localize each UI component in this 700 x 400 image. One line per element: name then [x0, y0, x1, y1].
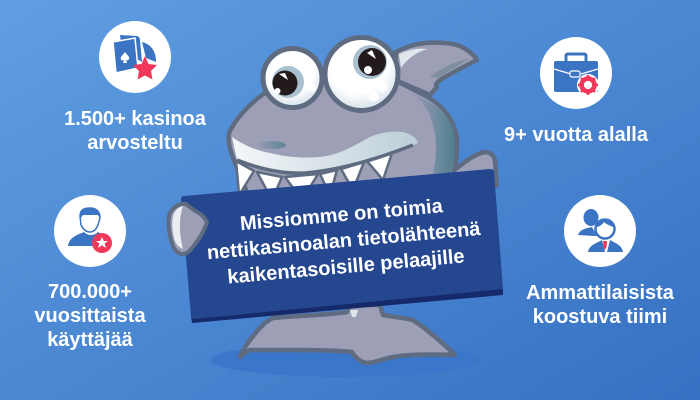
icon: user with star badge — [54, 195, 126, 267]
left eye — [263, 48, 322, 108]
icon: team people — [564, 195, 636, 267]
icon: briefcase and gear — [540, 37, 612, 109]
sign board — [181, 169, 503, 319]
label: 1.500+ kasinoa — [64, 108, 207, 130]
head — [229, 72, 457, 200]
label: Ammattilaisista — [526, 282, 675, 304]
stat: years in industry — [504, 37, 649, 146]
teeth — [236, 153, 392, 205]
stat: professional team: koostuva tiimi — [533, 306, 667, 328]
tail — [240, 305, 455, 363]
tail stripe — [350, 310, 358, 317]
sign text: Missiomme on toimia — [239, 195, 444, 235]
lower lip — [232, 132, 418, 173]
nostril — [256, 141, 286, 149]
label: 700.000+ — [48, 281, 132, 303]
label: 9+ vuotta alalla — [504, 124, 649, 146]
mission sign — [181, 169, 503, 323]
stat: yearly users: vuosittaista — [34, 305, 146, 327]
fin highlight — [172, 206, 183, 249]
mouth line — [237, 145, 413, 173]
left fin — [169, 204, 207, 254]
dorsal fin shade — [430, 58, 470, 78]
dorsal fin highlight — [399, 49, 427, 68]
stat: professional team — [526, 195, 675, 328]
body shading — [413, 94, 455, 197]
stat: yearly users: käyttäjää — [47, 329, 134, 351]
shark mascot — [211, 38, 497, 377]
sign text — [204, 192, 485, 290]
right fin — [440, 152, 497, 205]
sign text: kaikentasoisille pelaajille — [226, 245, 465, 289]
sign shadow edge — [191, 288, 503, 323]
sign text: nettikasinoalan tietolähteenä — [206, 218, 482, 264]
stat: casinos reviewed: arvosteltu — [87, 132, 183, 154]
icon: cards and star — [99, 21, 171, 93]
right eye — [325, 38, 398, 110]
stat: casinos reviewed — [64, 21, 207, 154]
ground shadow — [211, 343, 479, 377]
stat: yearly users — [34, 195, 146, 351]
dorsal fin — [395, 43, 477, 95]
